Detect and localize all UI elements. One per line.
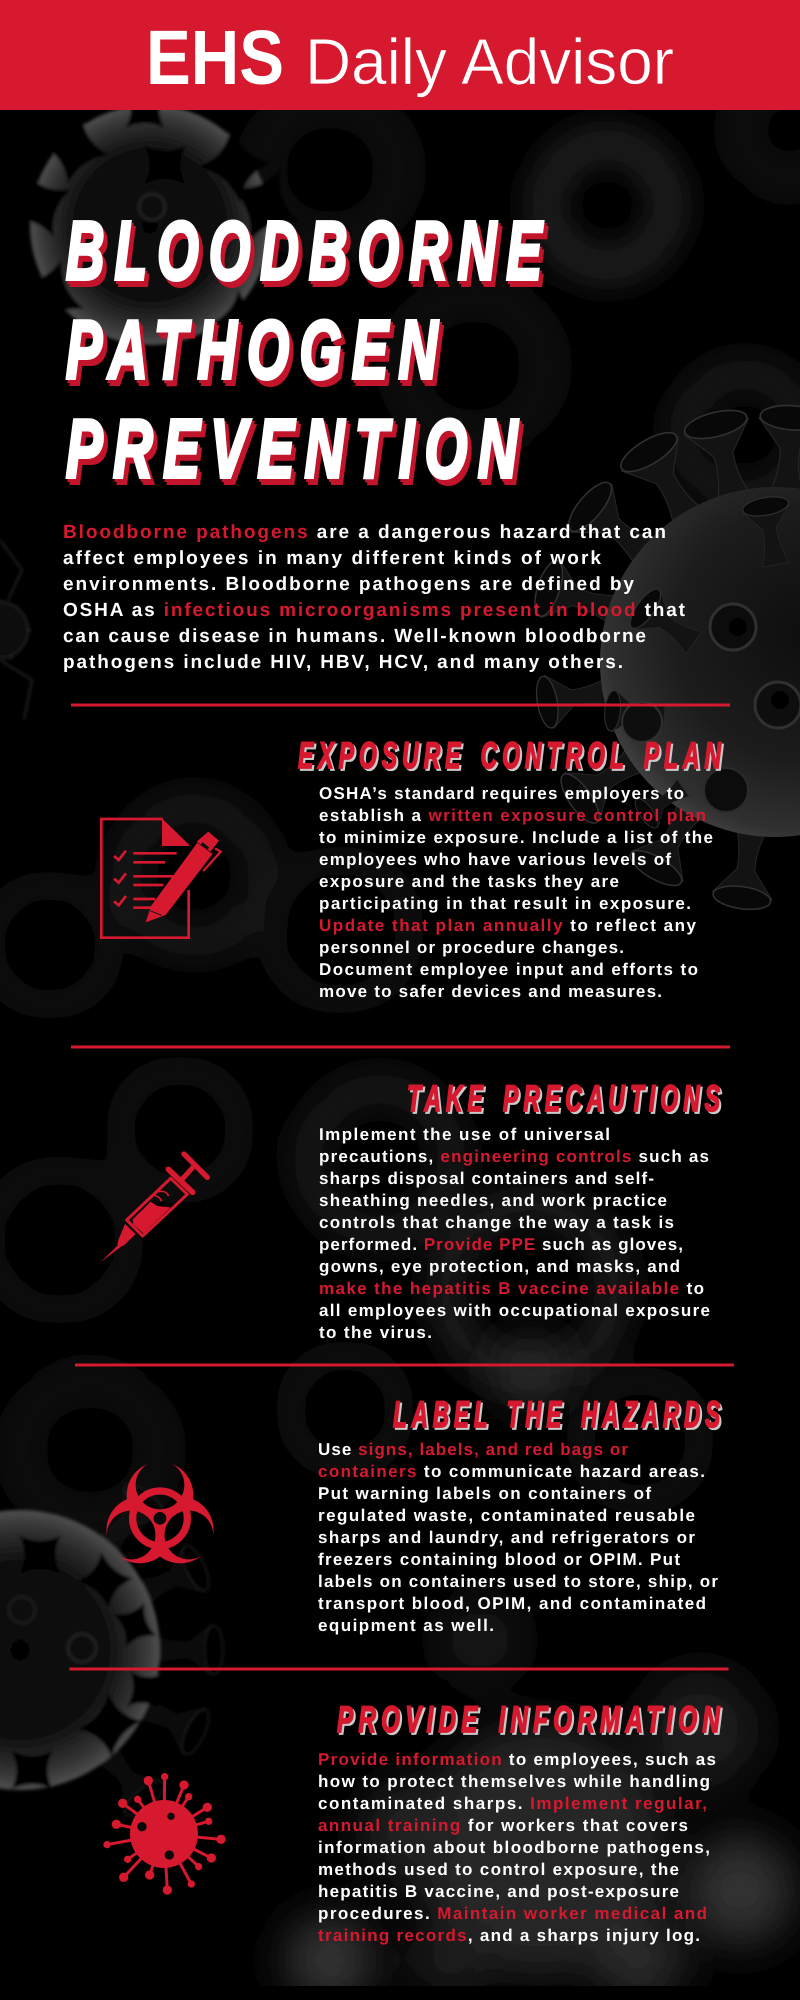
title [66, 204, 552, 495]
section text: Label the Hazards: transport blood, OPIM, and contaminated [318, 1594, 706, 1613]
bottom black band [0, 1986, 800, 2000]
section text: Label the Hazards: labels on containers used to store, ship, or [318, 1572, 718, 1591]
section text: Provide Information: methods used to control exposure, the [318, 1860, 679, 1879]
background: blurred virus rings [0, 80, 800, 1520]
section text: Provide Information: hepatitis B vaccine, and post-exposure [318, 1882, 679, 1901]
background: large right virus [529, 403, 800, 913]
icon: biohazard symbol [106, 1462, 214, 1563]
section text: Provide Information: how to protect themselves while handling [318, 1772, 710, 1791]
background: blurred lower-right virus [285, 1335, 795, 2000]
section text: Exposure Control Plan: move to safer devices and measures. [319, 982, 662, 1001]
section text: Take Precautions: controls that change the way a task is [319, 1213, 674, 1232]
intro paragraph [63, 522, 686, 673]
logo: EHS Daily Advisor [146, 15, 674, 101]
intro paragraph: environments. Bloodborne pathogens are defined by [63, 574, 634, 595]
intro paragraph: Bloodborne pathogens are a dangerous hazard that can [63, 522, 666, 543]
intro paragraph: pathogens include HIV, HBV, HCV, and many others. [63, 652, 623, 673]
section text: Label the Hazards: containers to communicate hazard areas. [318, 1462, 705, 1481]
logo: EHS Daily Advisor: Daily Advisor [305, 25, 674, 98]
section text: Label the Hazards [318, 1440, 718, 1635]
section text: Label the Hazards: Put warning labels on containers of [318, 1484, 651, 1503]
section text: Provide Information: Provide information to employees, such as [318, 1750, 716, 1769]
section text: Label the Hazards: regulated waste, contaminated reusable [318, 1506, 695, 1525]
section text: Exposure Control Plan: OSHA’s standard requires employers to [319, 784, 684, 803]
section text: Exposure Control Plan: to minimize exposure. Include a list of the [319, 828, 713, 847]
logo: EHS Daily Advisor: EHS [146, 15, 284, 101]
icon: virus [103, 1773, 226, 1895]
intro paragraph: affect employees in many different kinds of work [63, 548, 601, 569]
divider 3 [75, 1364, 734, 1366]
section text: Take Precautions [319, 1125, 710, 1342]
section text: Take Precautions: gowns, eye protection, and masks, and [319, 1257, 680, 1276]
background: left small virus [0, 540, 32, 720]
section text: Provide Information [318, 1750, 716, 1945]
section text: Label the Hazards: Use signs, labels, and red bags or [318, 1440, 628, 1459]
section text: Label the Hazards: sharps and laundry, and refrigerators or [318, 1528, 695, 1547]
section text: Exposure Control Plan: Update that plan annually to reflect any [319, 916, 697, 935]
section text: Provide Information: contaminated sharps. Implement regular, [318, 1794, 707, 1813]
section text: Exposure Control Plan: establish a written exposure control plan [319, 806, 706, 825]
section text: Take Precautions: Implement the use of universal [319, 1125, 610, 1144]
intro paragraph: OSHA as infectious microorganisms present in blood that [63, 600, 686, 621]
header band [0, 0, 800, 110]
divider 4 [70, 1668, 728, 1670]
section text: Exposure Control Plan: personnel or procedure changes. [319, 938, 624, 957]
section text: Provide Information: procedures. Maintain worker medical and [318, 1904, 707, 1923]
section text: Exposure Control Plan: employees who have various levels of [319, 850, 671, 869]
section text: Take Precautions: sheathing needles, and work practice [319, 1191, 667, 1210]
section text: Take Precautions: all employees with occupational exposure [319, 1301, 710, 1320]
section text: Exposure Control Plan: exposure and the tasks they are [319, 872, 619, 891]
divider 1 [71, 704, 730, 706]
icon: syringe [100, 1154, 207, 1263]
section text: Exposure Control Plan: Document employee input and efforts to [319, 960, 698, 979]
background: lower-left virus [0, 1478, 223, 1822]
intro paragraph: can cause disease in humans. Well-known bloodborne [63, 626, 646, 647]
icon: checklist with pen [101, 818, 221, 938]
section text: Provide Information: annual training for workers that covers [318, 1816, 688, 1835]
section text: Provide Information: information about bloodborne pathogens, [318, 1838, 710, 1857]
section text: Take Precautions: precautions, engineering controls such as [319, 1147, 709, 1166]
background: top-left virus [9, 92, 300, 351]
section text: Label the Hazards: freezers containing blood or OPIM. Put [318, 1550, 680, 1569]
title: PATHOGEN [66, 303, 448, 396]
section text: Take Precautions: sharps disposal containers and self- [319, 1169, 654, 1188]
section text: Provide Information: training records, and a sharps injury log. [318, 1926, 700, 1945]
section text: Take Precautions: performed. Provide PPE such as gloves, [319, 1235, 683, 1254]
title: PREVENTION [66, 402, 528, 495]
section text: Take Precautions: to the virus. [319, 1323, 432, 1342]
section text: Exposure Control Plan [319, 784, 713, 1001]
section text: Exposure Control Plan: participating in that result in exposure. [319, 894, 691, 913]
divider 2 [71, 1046, 730, 1048]
section text: Take Precautions: make the hepatitis B vaccine available to [319, 1279, 704, 1298]
section text: Label the Hazards: equipment as well. [318, 1616, 494, 1635]
